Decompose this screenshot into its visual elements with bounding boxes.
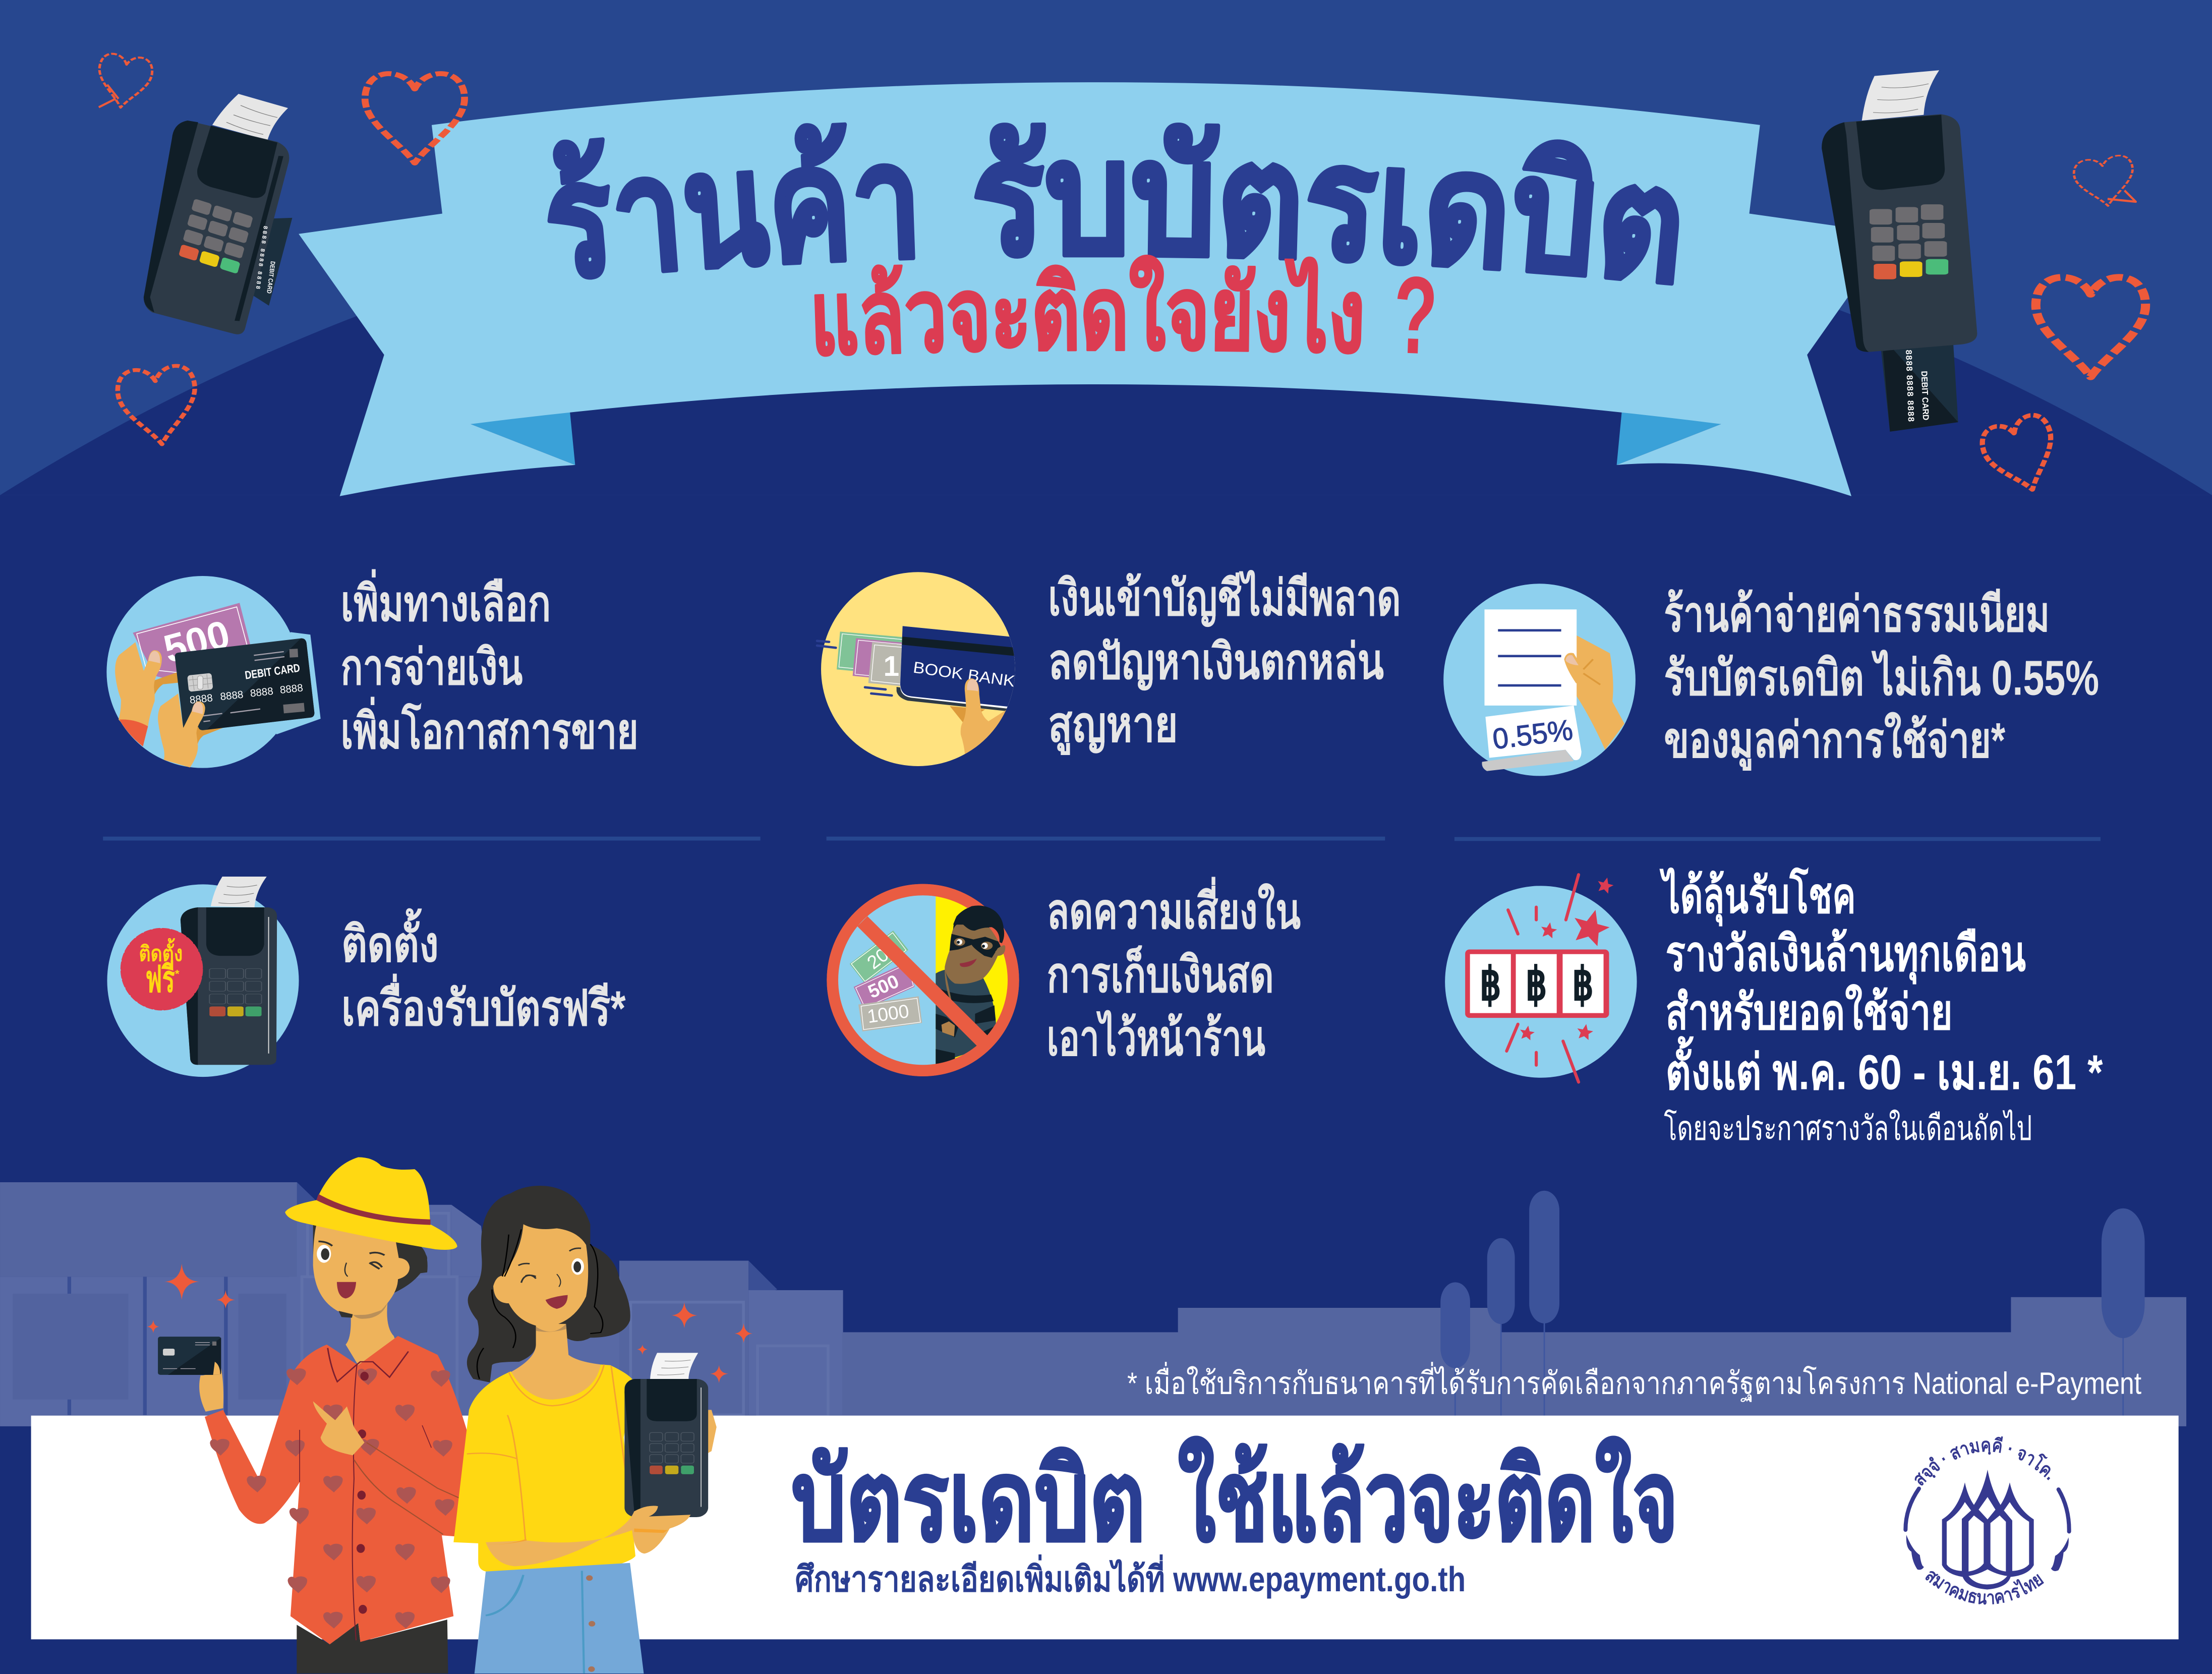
item 2 text: เงินเข้าบัญชีไม่มีพลาด [1048, 570, 1401, 628]
ribbon banner [299, 82, 1892, 496]
card text left: DEBIT CARD [265, 261, 276, 294]
item 2 icon: book bank: 1 [884, 651, 899, 682]
item 6 text: รางวัลเงินล้านทุกเดือน [1665, 926, 2026, 985]
dividers [103, 837, 2101, 841]
logo: Thai Bankers Association [1903, 1436, 2071, 1605]
item 4 text: ติดตั้ง [341, 908, 439, 972]
item 1 icon: card and banknote: DEBIT CARD [244, 661, 301, 682]
item 3 text: ของมูลค่าการใช้จ่าย* [1664, 712, 2005, 771]
card text right [1904, 350, 1931, 422]
prize note: โดยจะประกาศรางวัลในเดือนถัดไป [1664, 1109, 2032, 1147]
card text right: 8888 8888 8888 [1904, 350, 1916, 422]
item 6 icon: slot machine: ฿ [1526, 959, 1547, 1009]
item 6 icon: slot machine: ฿ [1572, 959, 1593, 1009]
free badge: * [175, 967, 180, 980]
item 5 text [1047, 877, 1301, 1066]
item 4 icon: POS terminal with free badge [107, 877, 299, 1077]
item 5 text: การเก็บเงินสด [1047, 945, 1274, 1002]
item 2 icon: book bank: BOOK BANK [912, 658, 1016, 690]
logo: Thai Bankers Association: สจฺจํ · สามคฺคี · จาโค. [1914, 1436, 2051, 1486]
footer slogan: ใช้แล้วจะติดใจ [1178, 1436, 1678, 1564]
card text left [255, 225, 276, 294]
item 1 icon: card and banknote: 8888 [220, 689, 244, 703]
item 3 icon: 0.55 percent receipt [1443, 584, 1636, 776]
title text: แล้วจะติดใจยังไง [814, 254, 1362, 357]
title text: รับบัตรเดบิต [974, 122, 1679, 285]
item 6 icon: slot machine [1445, 875, 1637, 1082]
characters [147, 1157, 752, 1673]
free badge: ฟรี [145, 959, 175, 1000]
item 2 text: สูญหาย [1048, 697, 1178, 756]
item 1 icon: card and banknote: 8888 [189, 692, 213, 706]
item 4 text [341, 908, 626, 1036]
item 6 text [1659, 868, 2103, 1100]
item 1 text: การจ่ายเงิน [341, 640, 522, 695]
sparkles [147, 1264, 752, 1383]
item 1 text: เพิ่มทางเลือก [341, 569, 551, 631]
item 1 icon: card and banknote [106, 576, 321, 768]
item 6 icon: slot machine: ฿ [1480, 959, 1501, 1009]
receipt label: 0.55% [1491, 714, 1575, 756]
item 2 text: ลดปัญหาเงินตกหล่น [1048, 633, 1384, 691]
item 2 icon: book bank [817, 572, 1019, 766]
logo: Thai Bankers Association: สมาคมธนาคารไทย [1926, 1571, 2044, 1605]
item 2 text [1048, 570, 1401, 756]
item 3 text [1664, 586, 2099, 771]
hearts [94, 52, 2145, 500]
free badge: ติดตั้ง [139, 938, 183, 965]
footer slogan: บัตรเดบิต [791, 1438, 1145, 1564]
item 4 text: เครื่องรับบัตรฟรี* [341, 974, 626, 1036]
card text left: 8888 8888 8888 [255, 225, 268, 290]
item 5 text: เอาไว้หน้าร้าน [1047, 1010, 1265, 1066]
card text right: DEBIT CARD [1919, 371, 1931, 421]
woman holding terminal [453, 1186, 717, 1673]
item 5 icon: no thief, no cash: 1000 [866, 1000, 910, 1027]
item 1 icon: card and banknote: 500 [159, 611, 235, 671]
title text: ร้านค้า [548, 122, 915, 279]
item 5 icon: no thief, no cash: 500 [865, 970, 902, 1002]
white footer panel [31, 1416, 2179, 1639]
trees [1440, 1191, 2145, 1416]
POS terminal left [144, 94, 293, 334]
free badge [123, 931, 201, 1008]
title text: ? [1397, 276, 1434, 354]
man with hat and card [158, 1157, 467, 1673]
city skyline [0, 1182, 2186, 1426]
POS terminal right [1822, 70, 1977, 432]
footer slogan [791, 1436, 1678, 1564]
item 6 text: ตั้งแต่ พ.ค. 60 - เม.ย. 61 * [1665, 1035, 2103, 1100]
title text [548, 122, 1679, 357]
item 1 icon: card and banknote: 8888 [279, 682, 304, 696]
item 5 icon: no thief, no cash [827, 884, 1019, 1076]
item 5 icon: no thief, no cash: 20 [863, 944, 893, 973]
item 3 text: ร้านค้าจ่ายค่าธรรมเนียม [1664, 586, 2050, 642]
item 6 text: สำหรับยอดใช้จ่าย [1665, 985, 1953, 1040]
item 1 text [341, 569, 638, 759]
item 1 text: เพิ่มโอกาสการขาย [341, 697, 638, 759]
item 6 text: ได้ลุ้นรับโชค [1659, 868, 1856, 927]
item 5 text: ลดความเสี่ยงใน [1047, 877, 1301, 939]
footer link text: ศึกษารายละเอียดเพิ่มเติมได้ที่ www.epayment.go.th [795, 1554, 1466, 1599]
item 1 icon: card and banknote: 8888 [250, 685, 274, 700]
